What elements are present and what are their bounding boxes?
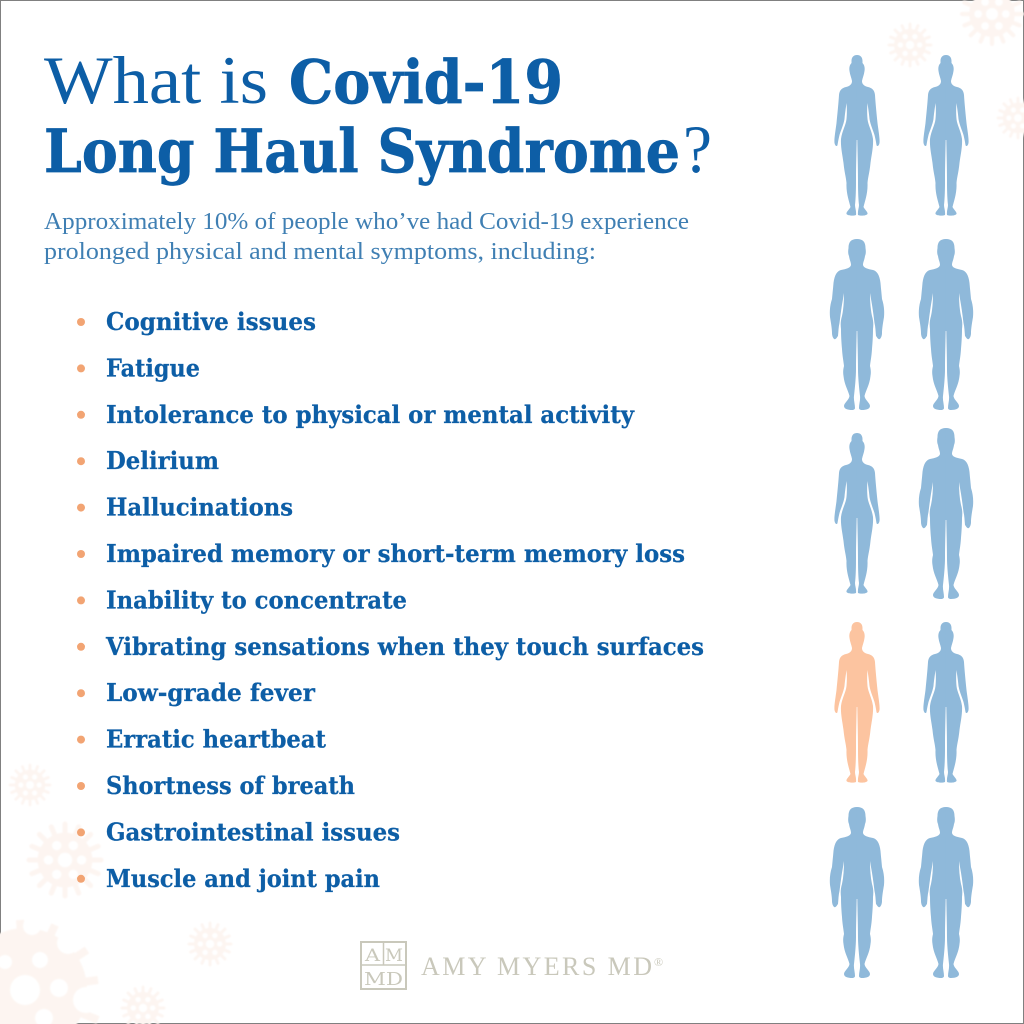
- title: [44, 42, 712, 187]
- title: ?: [683, 111, 712, 187]
- title: Covid-19: [289, 48, 563, 118]
- symptom list: Low-grade fever: [106, 678, 315, 707]
- symptom list: Vibrating sensations when they touch surfaces: [105, 632, 704, 661]
- logo: Amy Myers MD: M: [385, 946, 403, 966]
- logo: Amy Myers MD: MD: [364, 969, 403, 990]
- symptom list: [77, 307, 704, 893]
- symptom list: Hallucinations: [106, 493, 293, 522]
- symptom list: Erratic heartbeat: [106, 725, 326, 754]
- symptom list: Delirium: [106, 446, 219, 475]
- logo: Amy Myers MD: ®: [654, 955, 663, 969]
- symptom list: Impaired memory or short-term memory loss: [106, 539, 685, 568]
- title: Long Haul Syndrome: [44, 117, 680, 187]
- symptom list: Fatigue: [106, 353, 200, 382]
- symptom list: Gastrointestinal issues: [106, 817, 400, 846]
- symptom list: Muscle and joint pain: [106, 864, 380, 893]
- intro text: prolonged physical and mental symptoms, including:: [44, 239, 596, 265]
- symptom list: Intolerance to physical or mental activity: [106, 400, 635, 429]
- intro text: [44, 209, 689, 265]
- symptom list: Inability to concentrate: [106, 585, 407, 614]
- logo: Amy Myers MD: AMY MYERS MD: [421, 952, 652, 981]
- intro text: Approximately 10% of people who’ve had Covid-19 experience: [44, 209, 689, 235]
- logo: Amy Myers MD: [361, 942, 663, 990]
- logo: Amy Myers MD: A: [364, 946, 381, 966]
- title: What is: [44, 42, 268, 118]
- symptom list: Cognitive issues: [106, 307, 316, 336]
- human figures: one in ten highlighted: [830, 55, 973, 978]
- symptom list: Shortness of breath: [106, 771, 355, 800]
